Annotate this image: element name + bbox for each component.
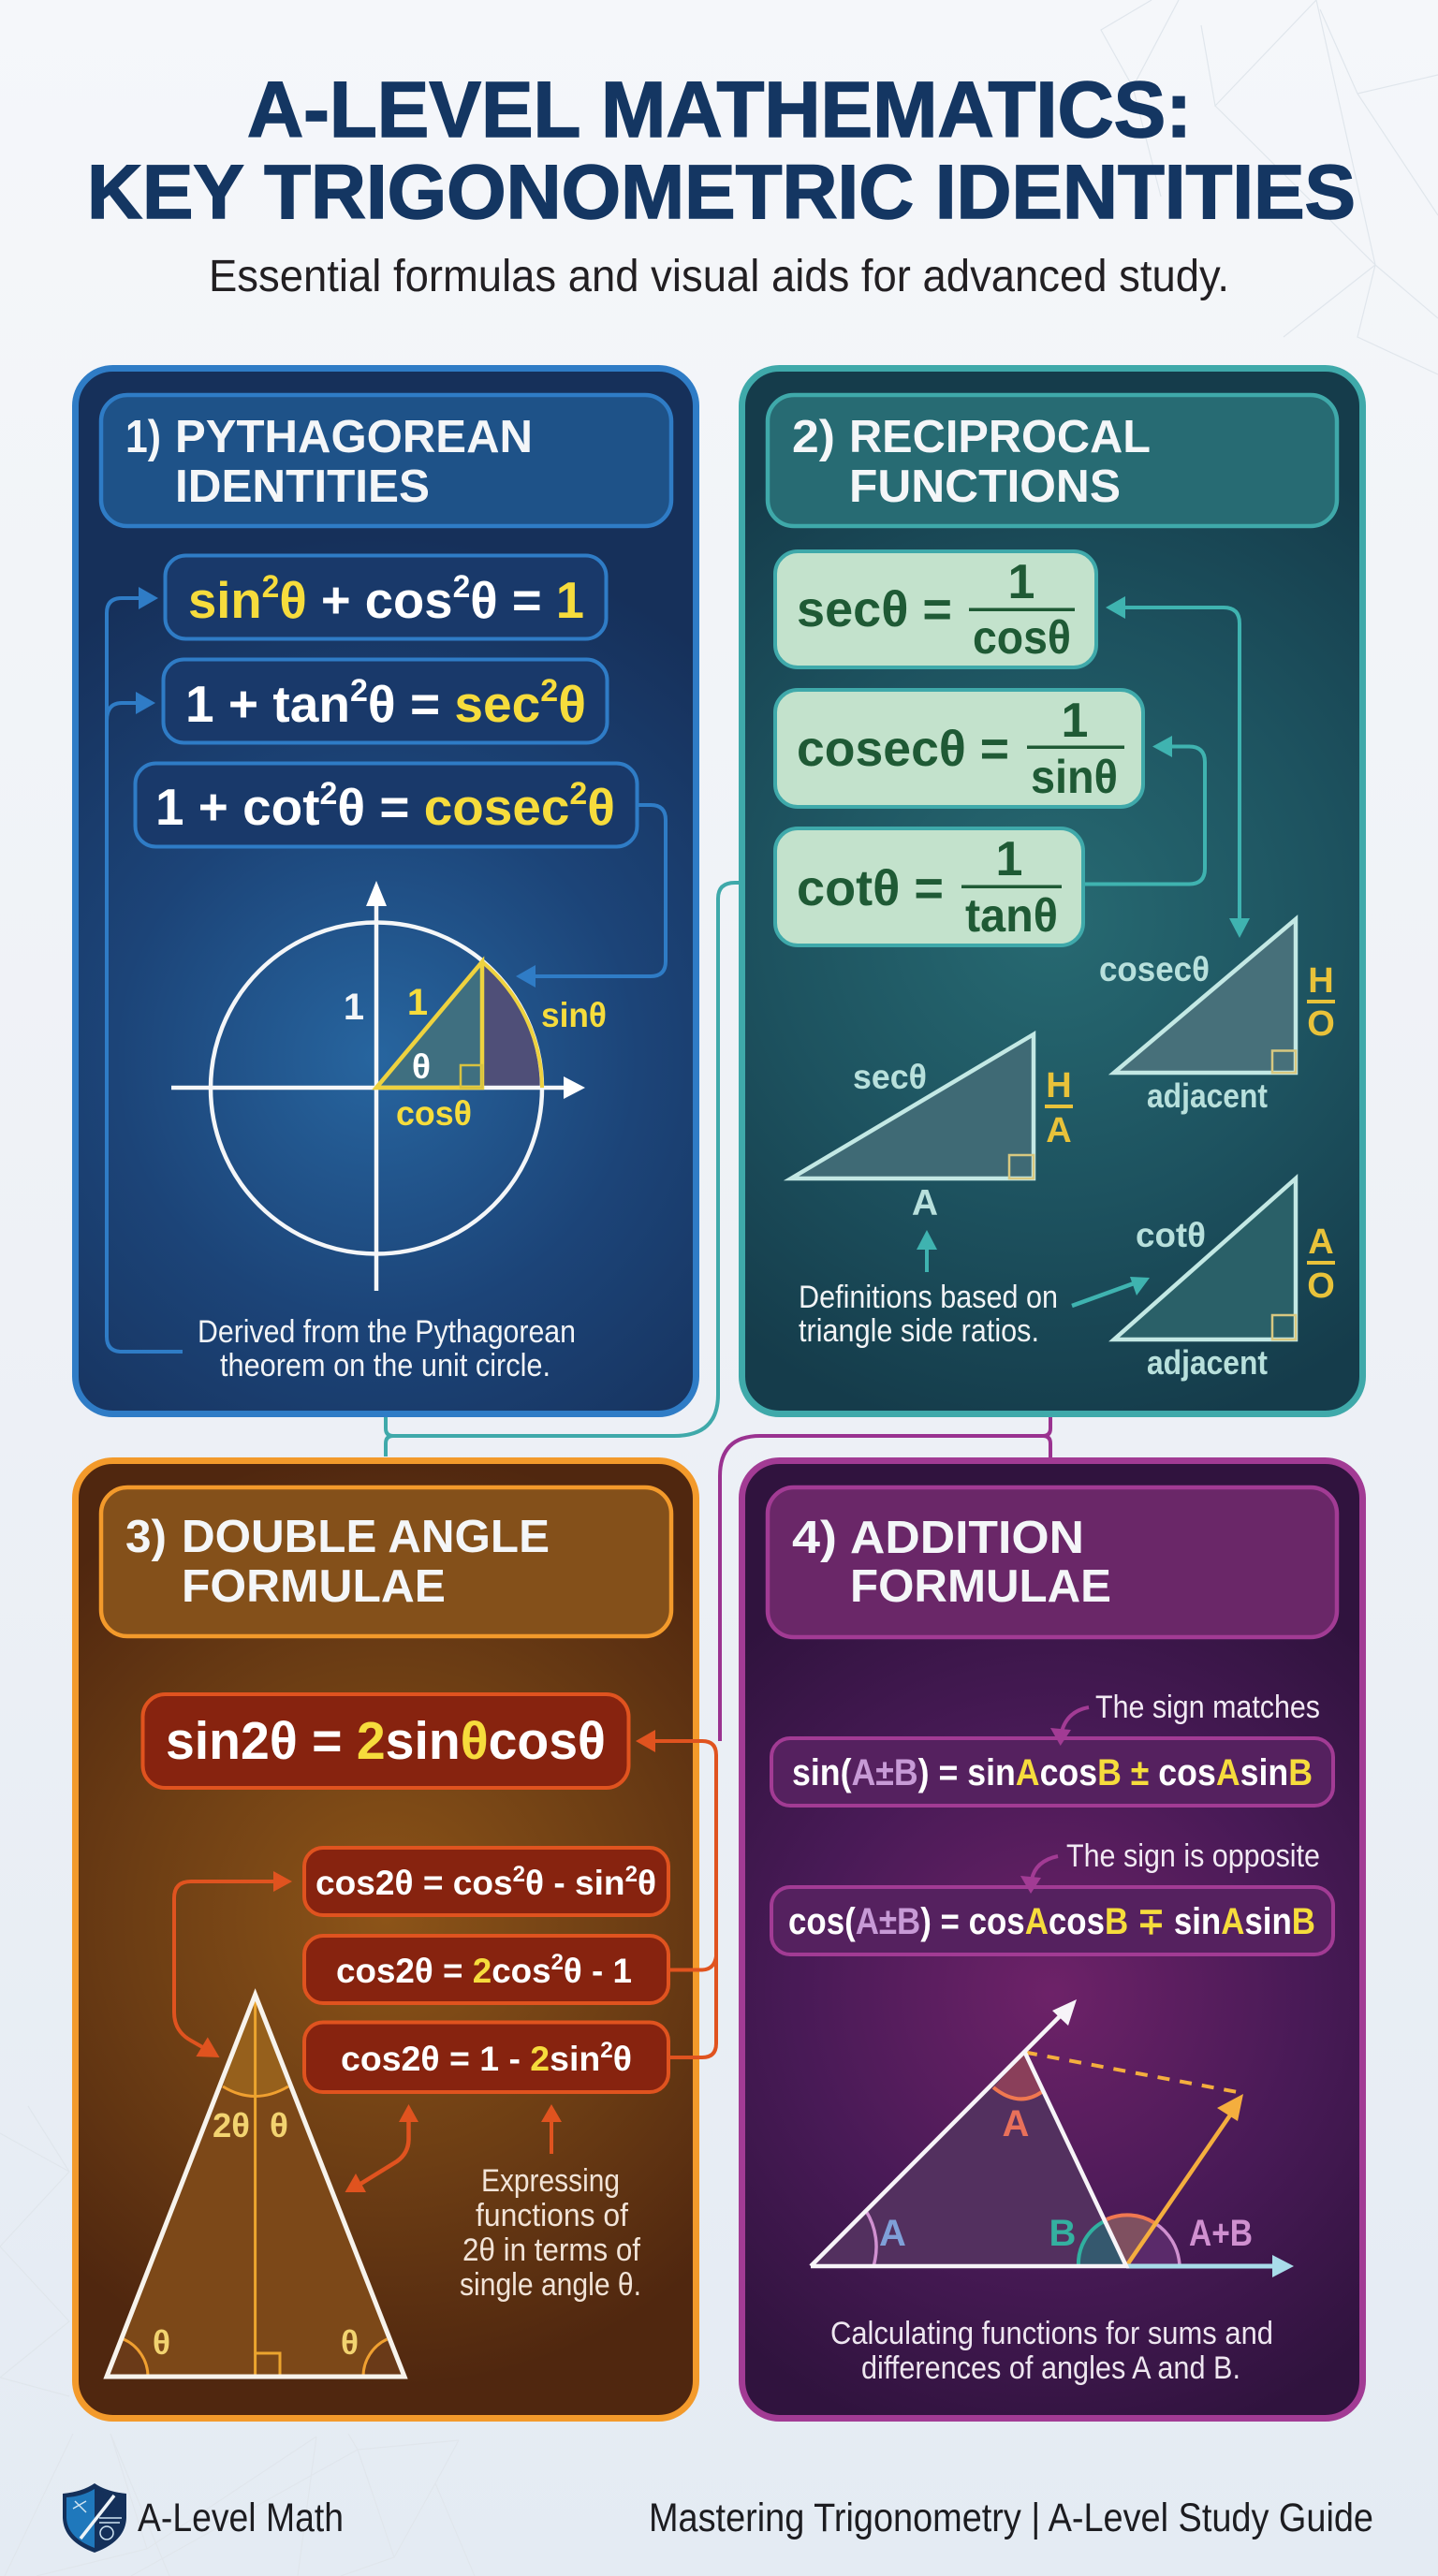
panel 3 caption: single angle θ. bbox=[460, 2267, 641, 2303]
arrow: caption to cot triangle bbox=[1072, 1277, 1150, 1306]
panel 1 heading: IDENTITIES bbox=[175, 461, 430, 512]
formula: sin squared plus cos squared bbox=[165, 556, 607, 638]
panel: reciprocal functions bbox=[741, 369, 1363, 1413]
formula: sin squared plus cos squared: = 1 bbox=[512, 571, 584, 629]
triangle: cosec bbox=[1099, 919, 1335, 1115]
isosceles triangle diagram: θ bbox=[341, 2323, 359, 2362]
isosceles triangle diagram bbox=[107, 1995, 404, 2377]
formula: cos 2 theta, squares bbox=[304, 1848, 668, 1915]
panel: pythagorean identities bbox=[75, 369, 697, 1413]
panel 1 heading: 1) bbox=[125, 412, 161, 462]
formula: cos of A plus or minus B bbox=[771, 1887, 1333, 1954]
formula: cot bbox=[775, 828, 1083, 945]
angle sum diagram: A bbox=[1003, 2103, 1029, 2144]
triangle: sec: A bbox=[912, 1183, 938, 1223]
formula: cosec: 1 bbox=[1062, 694, 1088, 748]
panel 2 heading: FUNCTIONS bbox=[849, 461, 1121, 512]
formula: sin squared plus cos squared: θ bbox=[470, 571, 498, 629]
formula: cos 2 theta, two sin squared: 2 bbox=[600, 2038, 613, 2063]
triangle: cosec: cosecθ bbox=[1099, 950, 1210, 988]
formula: one plus cot squared: 2 bbox=[320, 776, 337, 812]
formula: cos 2 theta, two sin squared: θ bbox=[613, 2040, 632, 2078]
formula: cos 2 theta, squares: 2 bbox=[513, 1862, 525, 1887]
arrow: cosec formula to circle bbox=[516, 805, 666, 988]
panel 2 heading: 2) bbox=[792, 412, 835, 462]
panel 2 heading bbox=[768, 395, 1337, 526]
note: the sign is opposite: The sign is opposite bbox=[1066, 1838, 1320, 1874]
formula: one plus cot squared: θ bbox=[587, 778, 615, 836]
panel 4 heading bbox=[768, 1487, 1337, 1637]
panel 4 heading: 4) bbox=[792, 1513, 837, 1563]
panel 3 caption: functions of bbox=[476, 2198, 629, 2233]
title: A-LEVEL MATHEMATICS: bbox=[247, 66, 1192, 154]
panel 2 caption: Definitions based on bbox=[799, 1280, 1058, 1315]
formula: one plus tan squared bbox=[163, 659, 607, 743]
formula: sin squared plus cos squared: sin bbox=[188, 569, 307, 629]
panel 4 heading: FORMULAE bbox=[850, 1561, 1111, 1612]
formula: sin squared plus cos squared: 2 bbox=[453, 569, 470, 605]
arrow: cot formula to cosec formula bbox=[1085, 736, 1205, 884]
formula: sec: secθ = bbox=[797, 581, 952, 637]
formula: cosec: sinθ bbox=[1031, 751, 1118, 803]
panel 2 caption bbox=[799, 1280, 1058, 1349]
formula: cos 2 theta, squares: cos2θ = cos bbox=[315, 1864, 512, 1902]
formula: cot: cotθ = bbox=[797, 860, 944, 916]
angle sum diagram: A bbox=[879, 2213, 906, 2254]
triangle: cosec: H bbox=[1308, 961, 1334, 1001]
panel: double angle formulae bbox=[75, 1460, 697, 2419]
panel 1 caption: theorem on the unit circle. bbox=[220, 1348, 550, 1383]
triangle: sec: A bbox=[1046, 1111, 1072, 1150]
formula: cos 2 theta, squares: - sin bbox=[553, 1864, 624, 1902]
subtitle: Essential formulas and visual aids for advanced study. bbox=[209, 252, 1229, 301]
arrow: sec formula to cosec triangle bbox=[1106, 596, 1250, 938]
panel 3 heading: FORMULAE bbox=[182, 1561, 446, 1612]
arrow: sign opposite bbox=[1020, 1856, 1058, 1894]
connector: panel 2 and 4 to panel 3 bbox=[720, 1417, 1050, 1741]
panel 3 heading bbox=[101, 1487, 671, 1636]
triangle: cot: cotθ bbox=[1136, 1216, 1206, 1254]
triangle: cot: adjacent bbox=[1147, 1343, 1268, 1382]
formula: sin 2 theta bbox=[142, 1694, 629, 1788]
panel 4 caption: Calculating functions for sums and bbox=[830, 2316, 1273, 2351]
arrow: triangle to cos formula bbox=[174, 1871, 292, 2057]
panel: addition formulae bbox=[741, 1460, 1363, 2419]
unit circle diagram bbox=[171, 881, 607, 1291]
formula: cos 2 theta, squares: θ bbox=[525, 1864, 544, 1902]
angle sum diagram: B bbox=[1049, 2213, 1076, 2254]
unit circle diagram: 1 bbox=[407, 982, 428, 1023]
formula: one plus cot squared: 1 + cot bbox=[155, 778, 320, 836]
formula: cos 2 theta, two sin squared: cos2θ = 1 - 2sin bbox=[341, 2040, 600, 2078]
isosceles triangle diagram: 2θ bbox=[213, 2106, 250, 2144]
footer logo: A-Level Math bbox=[138, 2496, 344, 2540]
panel 4 caption: differences of angles A and B. bbox=[861, 2350, 1240, 2386]
panel 3 caption: 2θ in terms of bbox=[462, 2232, 641, 2268]
formula: one plus cot squared bbox=[135, 764, 637, 846]
unit circle diagram: cosθ bbox=[396, 1094, 472, 1133]
formula: one plus tan squared: 2 bbox=[540, 673, 558, 709]
formula: cos 2 theta, two sin squared bbox=[304, 2022, 668, 2092]
formula: cot: 1 bbox=[996, 832, 1022, 886]
formula: sin 2 theta: sin2θ = 2sinθcosθ bbox=[166, 1711, 606, 1771]
arrow: sign matches bbox=[1050, 1707, 1089, 1746]
formula: cot: tanθ bbox=[965, 889, 1058, 942]
formula: sin squared plus cos squared: θ bbox=[279, 571, 307, 629]
triangle: sec bbox=[791, 1034, 1073, 1223]
formula: cos 2 theta, two cos squared: - 1 bbox=[592, 1952, 632, 1990]
triangle: cosec: O bbox=[1307, 1004, 1335, 1044]
angle sum diagram: A+B bbox=[1189, 2213, 1253, 2254]
formula: cos 2 theta, squares: 2 bbox=[625, 1862, 638, 1887]
panel 1 caption bbox=[198, 1314, 576, 1383]
formula: one plus cot squared: θ bbox=[337, 778, 365, 836]
arrow: caption to formula bbox=[541, 2104, 562, 2154]
panel 3 heading: DOUBLE ANGLE bbox=[182, 1512, 550, 1562]
isosceles triangle diagram: θ bbox=[153, 2323, 170, 2362]
panel 1 caption: Derived from the Pythagorean bbox=[198, 1314, 576, 1350]
triangle: cot: O bbox=[1307, 1266, 1335, 1306]
formula: cos of A plus or minus B: cos(A±B) = cosAcosB ∓ sinAsinB bbox=[788, 1901, 1315, 1942]
triangle: cosec: adjacent bbox=[1147, 1076, 1268, 1115]
footer logo bbox=[63, 2483, 344, 2553]
formula: sin squared plus cos squared: 2 bbox=[262, 569, 279, 605]
panel 1 heading: PYTHAGOREAN bbox=[175, 412, 533, 462]
angle sum diagram bbox=[811, 1999, 1294, 2277]
unit circle diagram: sinθ bbox=[541, 996, 607, 1034]
triangle: cot: A bbox=[1308, 1222, 1334, 1262]
panel 4 heading: ADDITION bbox=[850, 1513, 1084, 1563]
triangle: sec: secθ bbox=[853, 1058, 927, 1096]
panel 4 caption bbox=[830, 2316, 1273, 2386]
formula: one plus tan squared: = sec bbox=[410, 675, 540, 733]
formula: one plus tan squared: θ bbox=[558, 675, 586, 733]
unit circle diagram: θ bbox=[412, 1047, 431, 1086]
formula: sin of A plus or minus B: sin(A±B) = sinAcosB ± cosAsinB bbox=[792, 1752, 1313, 1793]
arrow: formula to triangle bbox=[345, 2104, 418, 2192]
isosceles triangle diagram: θ bbox=[270, 2106, 288, 2144]
formula: one plus tan squared: 1 + tan bbox=[185, 675, 350, 733]
formula: sec bbox=[775, 551, 1096, 667]
formula: one plus cot squared: 2 bbox=[569, 776, 587, 812]
unit circle diagram: 1 bbox=[344, 987, 364, 1028]
panel 3 caption: Expressing bbox=[481, 2163, 620, 2199]
triangle: cot bbox=[1114, 1178, 1335, 1382]
formula: sec: 1 bbox=[1008, 555, 1034, 609]
panel 2 caption: triangle side ratios. bbox=[799, 1313, 1039, 1349]
title: KEY TRIGONOMETRIC IDENTITIES bbox=[87, 150, 1356, 235]
connector: panel 1 and 3 to panel 2 bbox=[386, 883, 741, 1456]
formula: cos 2 theta, two cos squared: 2 bbox=[551, 1950, 564, 1975]
arrow: caption to sec triangle bbox=[917, 1230, 937, 1272]
formula: cos 2 theta, two cos squared: θ bbox=[564, 1952, 582, 1990]
formula: cos 2 theta, two cos squared bbox=[304, 1936, 668, 2003]
formula: cosec bbox=[775, 690, 1143, 807]
formula: cos 2 theta, two cos squared: cos2θ = 2cos bbox=[336, 1952, 551, 1990]
formula: one plus cot squared: = cosec bbox=[379, 778, 570, 836]
formula: sec: cosθ bbox=[973, 611, 1071, 664]
panel 1 heading bbox=[101, 395, 671, 526]
formula: sin of A plus or minus B bbox=[771, 1738, 1333, 1806]
triangle: sec: H bbox=[1046, 1066, 1072, 1105]
note: the sign matches: The sign matches bbox=[1095, 1690, 1320, 1725]
panel 2 heading: RECIPROCAL bbox=[849, 412, 1151, 462]
panel 3 heading: 3) bbox=[125, 1512, 167, 1562]
icon: shield bbox=[63, 2483, 126, 2553]
panel 3 caption bbox=[460, 2163, 641, 2303]
arrow: caption to formulas bbox=[107, 587, 183, 1352]
formula: sin squared plus cos squared: + cos bbox=[321, 571, 454, 629]
formula: cos 2 theta, squares: θ bbox=[638, 1864, 656, 1902]
connector: double angle formulae to sin 2 theta bbox=[636, 1730, 716, 2057]
formula: cosec: cosecθ = bbox=[797, 721, 1009, 777]
title bbox=[87, 66, 1356, 235]
formula: one plus tan squared: 2 bbox=[350, 673, 368, 709]
formula: one plus tan squared: θ bbox=[368, 675, 396, 733]
